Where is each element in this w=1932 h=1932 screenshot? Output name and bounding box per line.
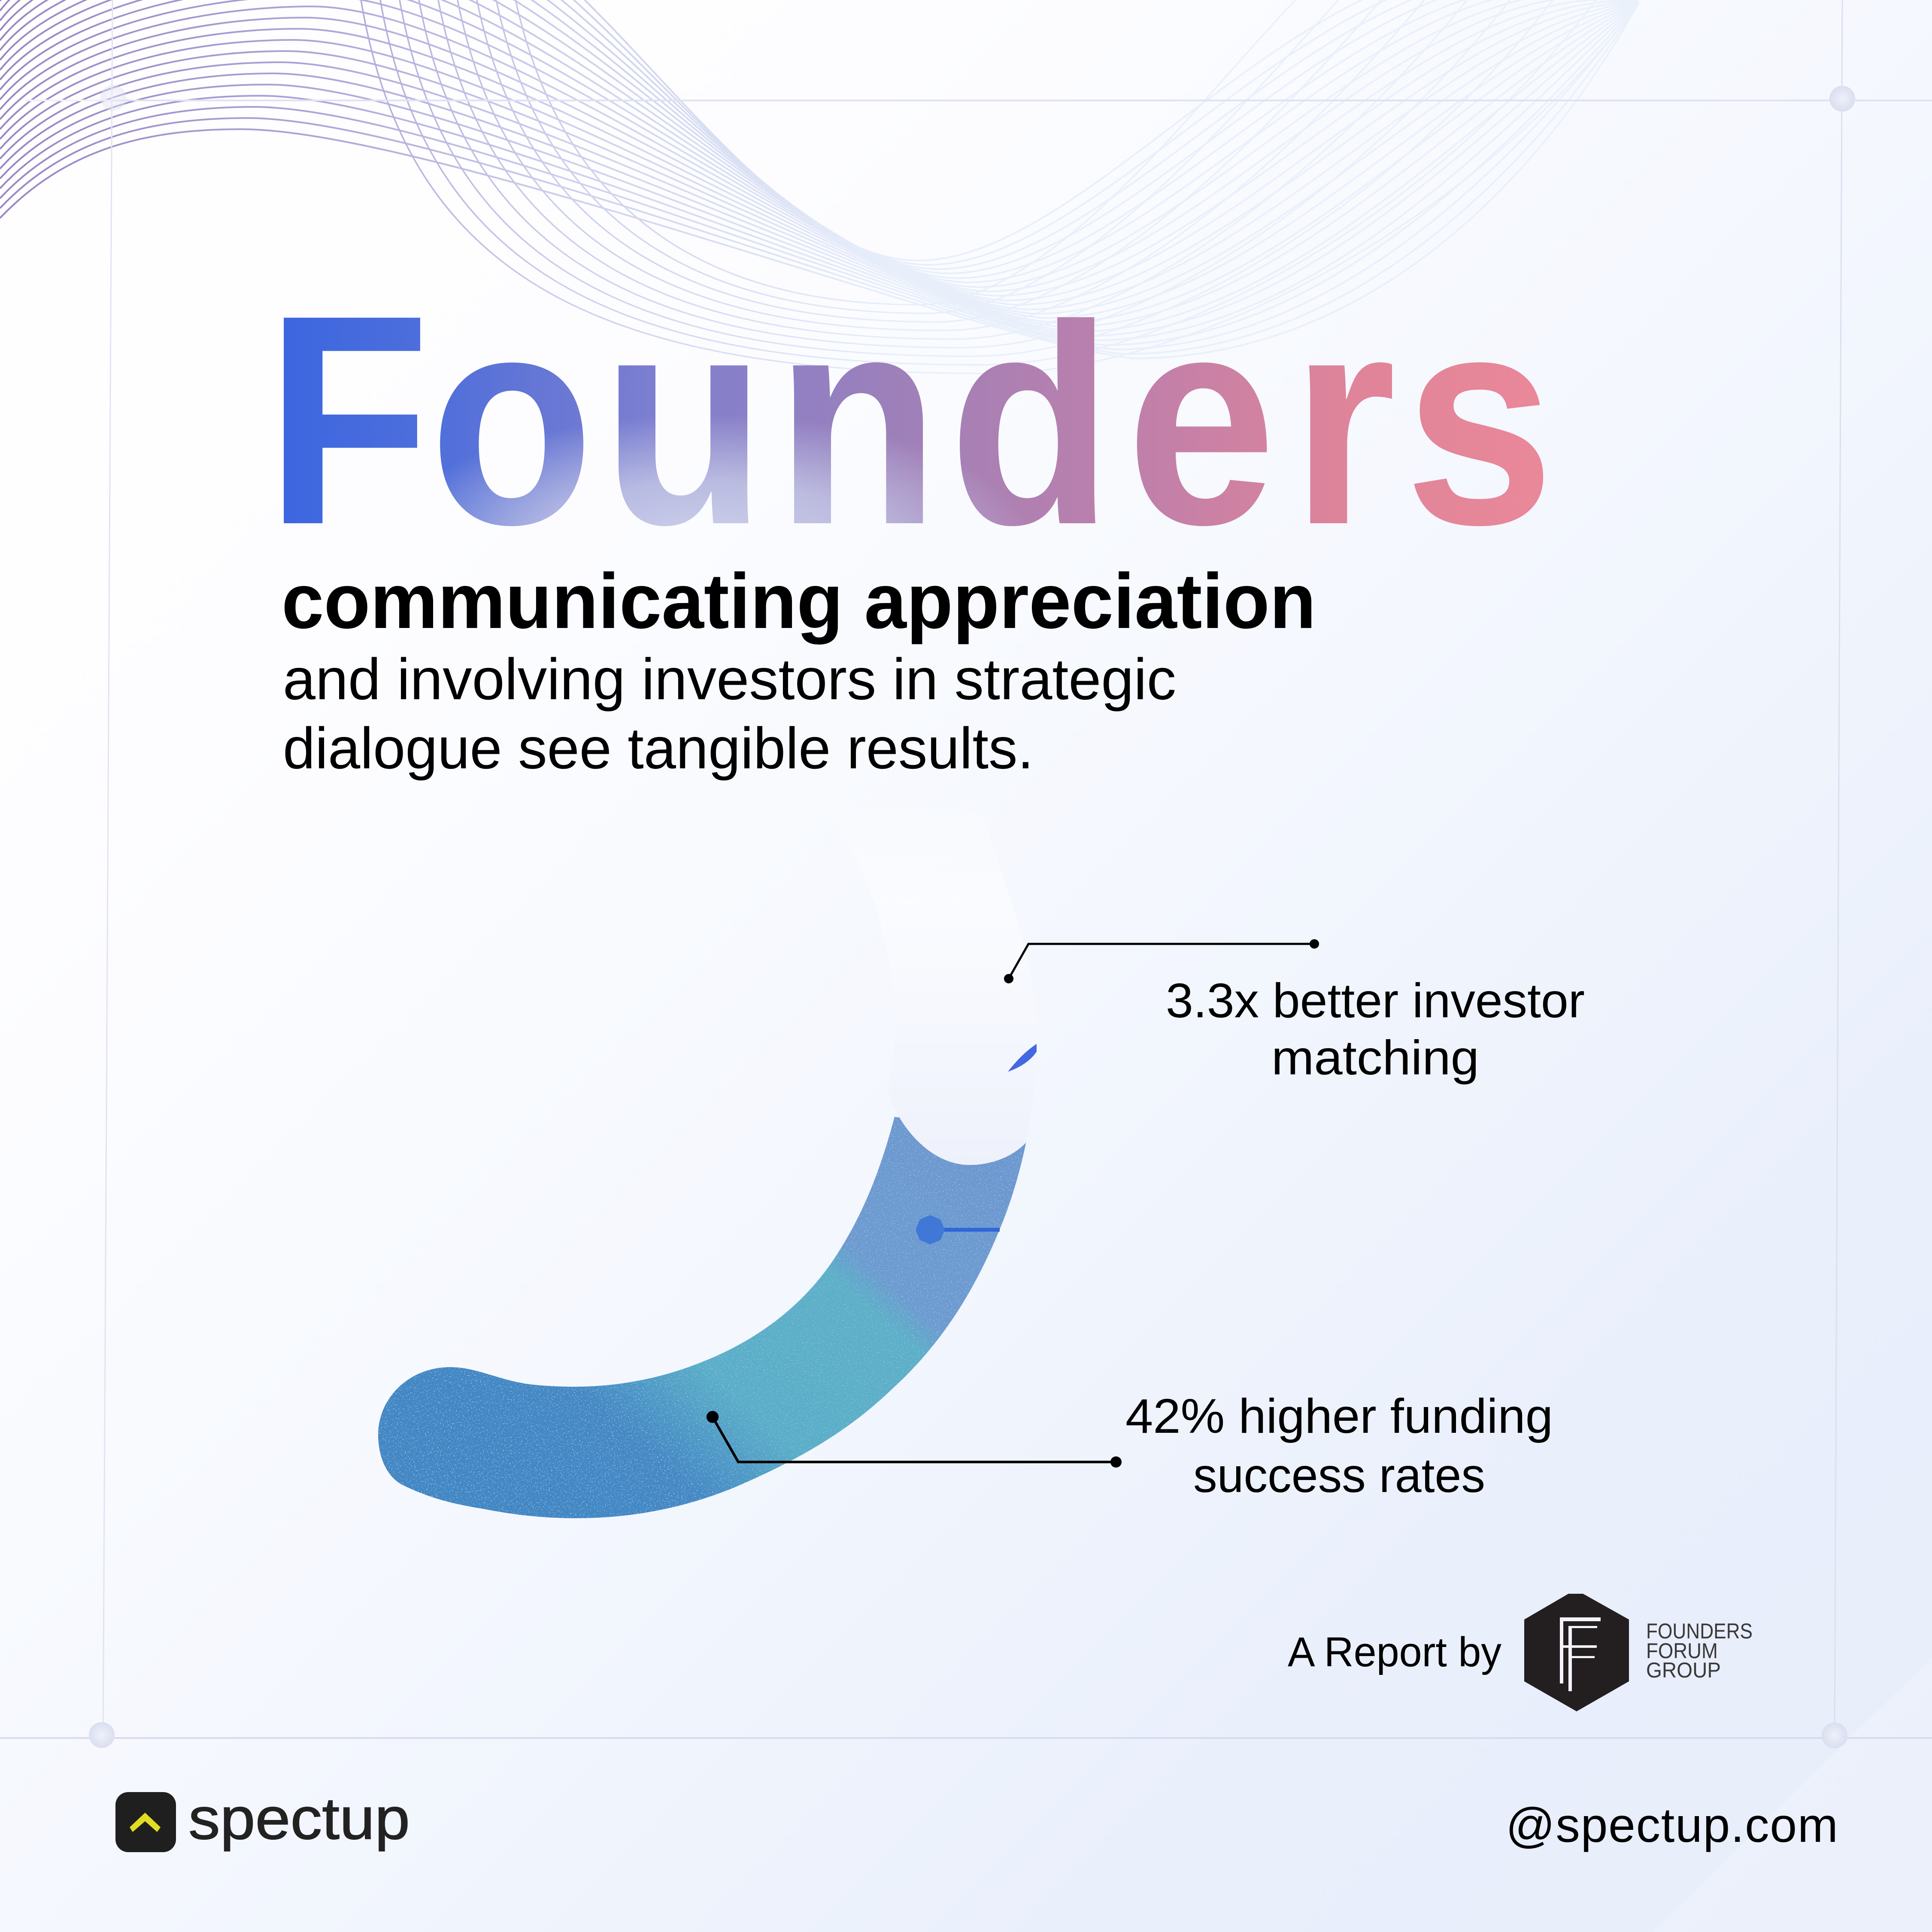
wordmark: FOUNDERS (1646, 1619, 1753, 1643)
attribution: a report by Founders Forum Group (1288, 1594, 1753, 1711)
wave line pattern (0, 0, 1639, 373)
icon: blue node and stem (916, 1215, 1000, 1244)
icon: Founders Forum hexagon logo (1524, 1594, 1629, 1711)
callout text: 3.3x better investor (1166, 974, 1585, 1028)
arc: pale upper section (832, 794, 1037, 1165)
body text: dialogue see tangible results. (283, 716, 1034, 781)
icon: blue sliver (1008, 1044, 1037, 1072)
callout leader line (1004, 939, 1319, 983)
body text: and involving investors in strategic (283, 646, 1176, 712)
brand: spectup logo (115, 1786, 410, 1852)
callout text (1166, 974, 1585, 1085)
title: Founders: Founders (266, 253, 1554, 587)
callout: 3.3x better investor matching (1004, 939, 1585, 1085)
subheading: communicating appreciation: communicating appreciation (282, 557, 1316, 645)
wordmark: GROUP (1646, 1658, 1721, 1682)
wordmark (1646, 1619, 1753, 1682)
arc: coloured lower section (378, 1117, 1028, 1518)
icon: spectup badge (115, 1792, 176, 1852)
body text (283, 646, 1176, 781)
curved progress arc (378, 794, 1037, 1518)
callout leader line (707, 1411, 1122, 1468)
wordmark: FORUM (1646, 1639, 1718, 1663)
callout text: matching (1271, 1031, 1479, 1085)
callout text: 42% higher funding (1125, 1389, 1553, 1443)
callout text: success rates (1193, 1448, 1485, 1502)
callout: 42% higher funding success rates (707, 1389, 1553, 1502)
website handle: @spectup.com (1506, 1798, 1838, 1852)
wordmark: spectup (188, 1786, 410, 1852)
callout text (1125, 1389, 1553, 1502)
attribution label: A Report by (1288, 1629, 1501, 1675)
